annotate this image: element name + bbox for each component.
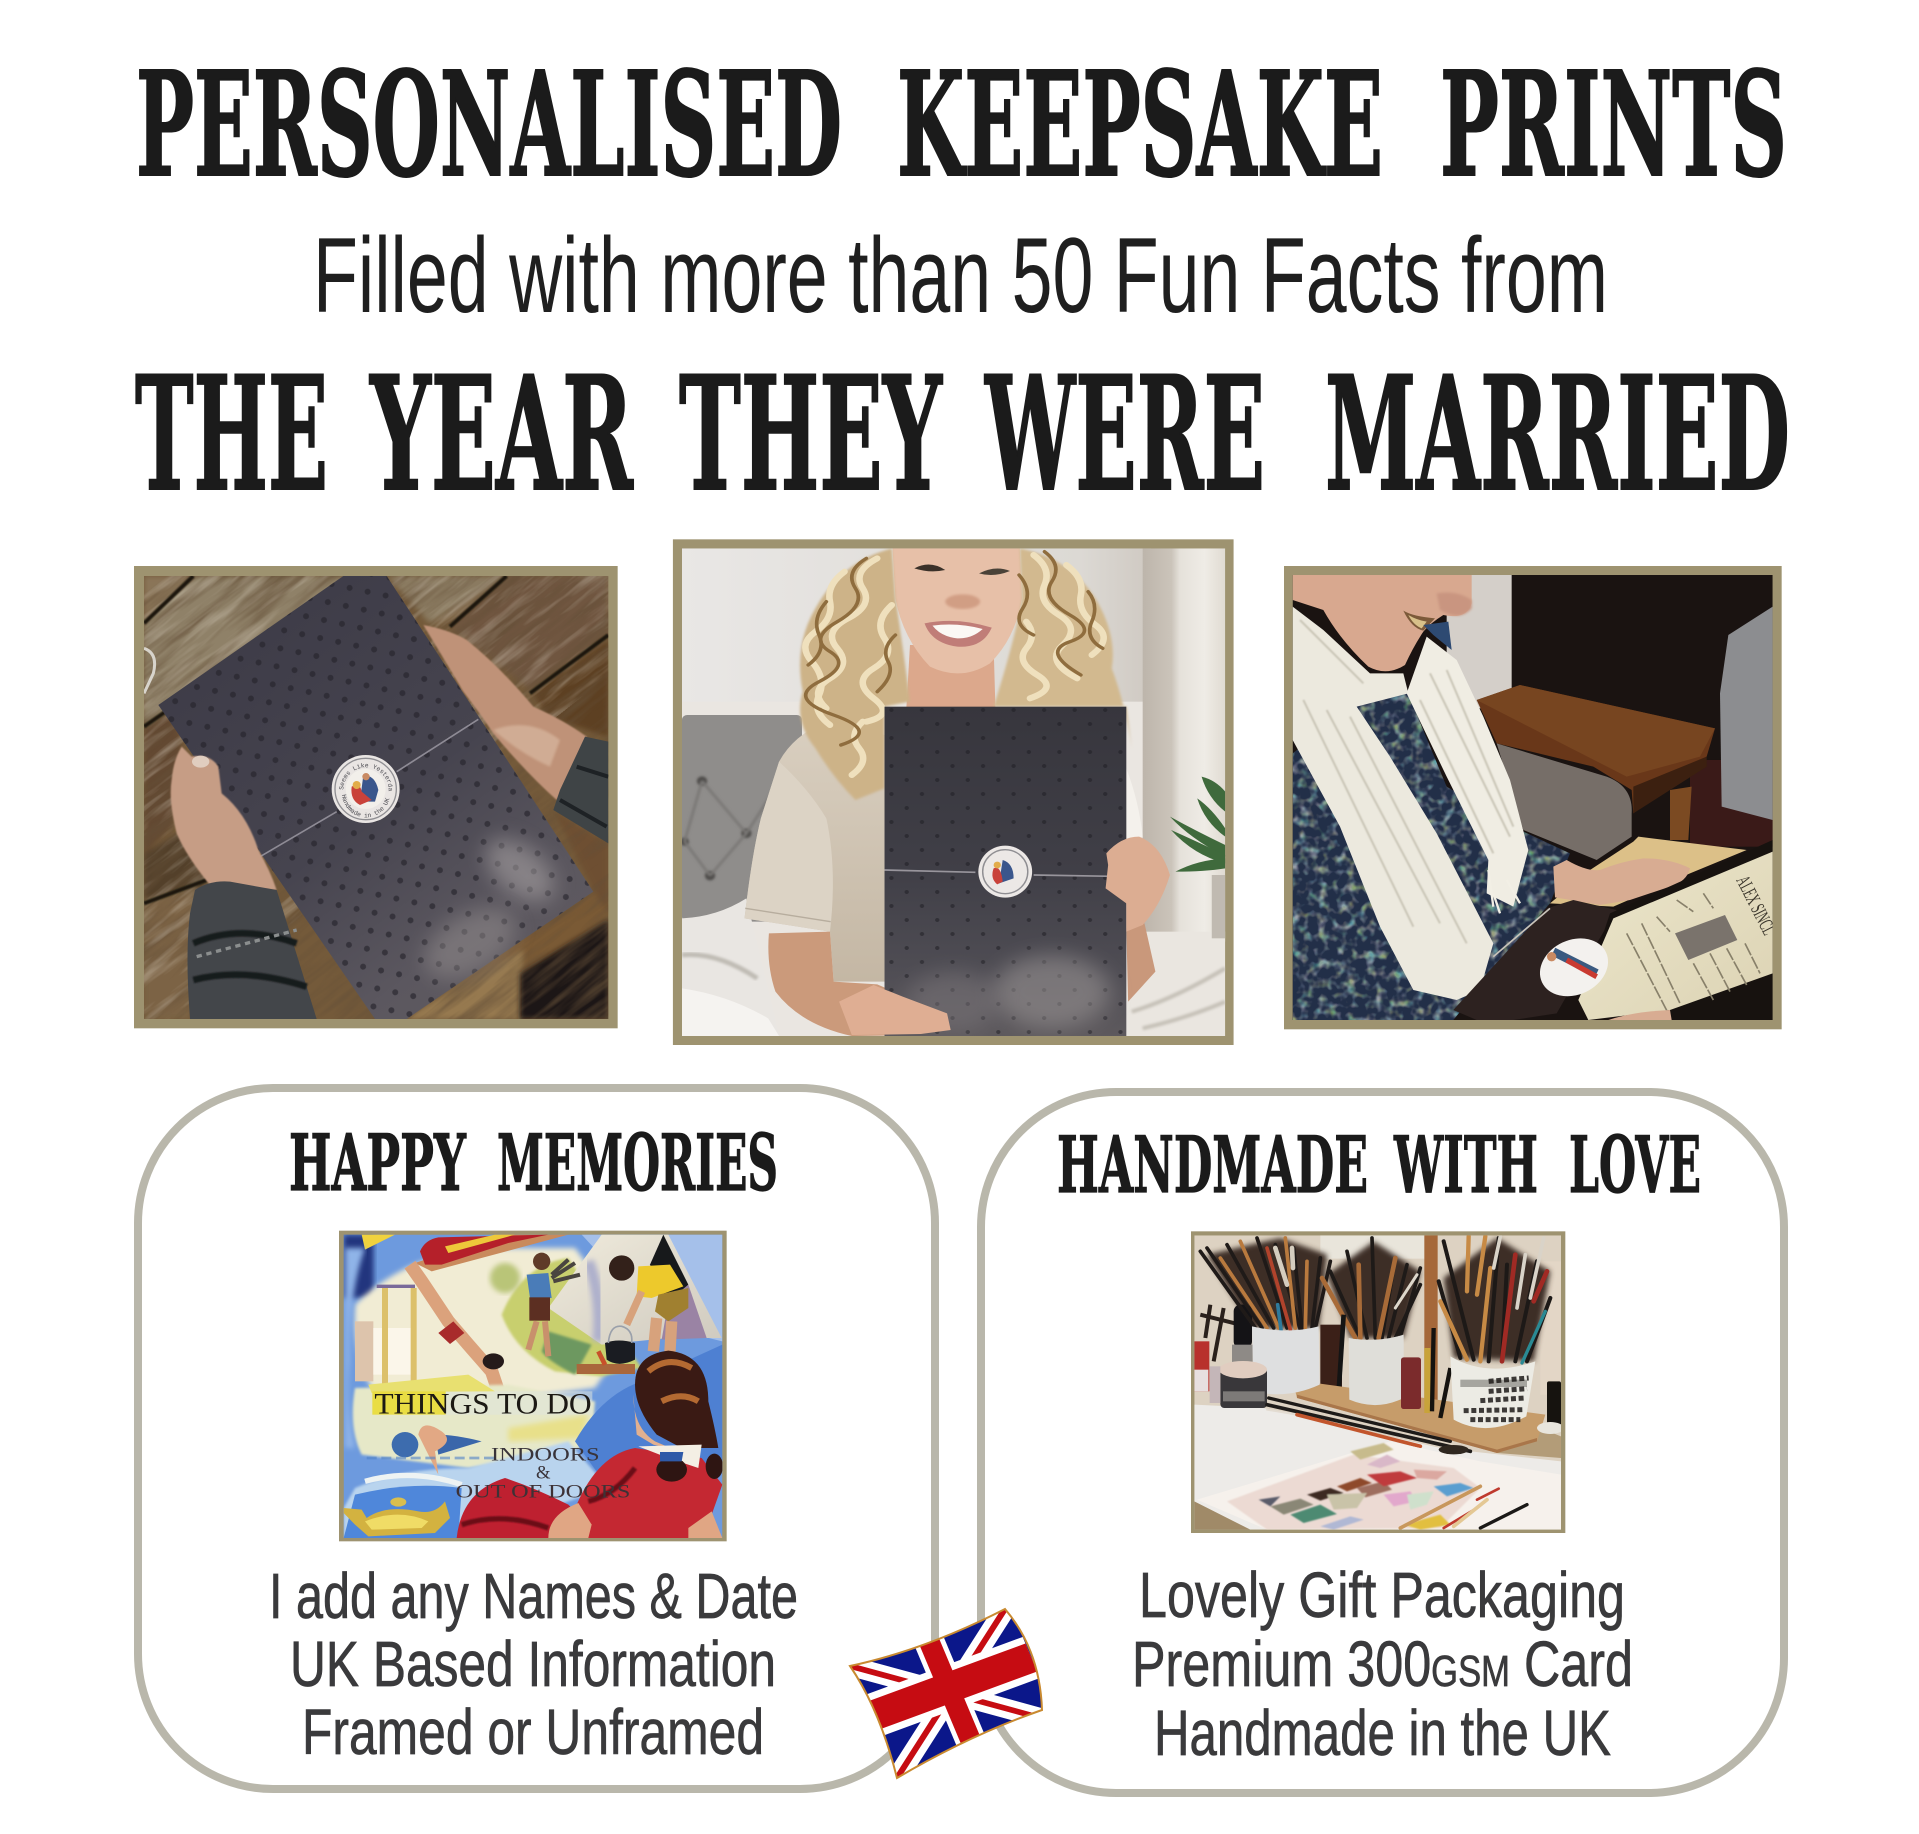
heading: happy memories xyxy=(289,1118,778,1209)
table surface xyxy=(1194,1405,1561,1530)
plant and pot xyxy=(1170,777,1225,938)
title: The Year They Were Married: WERE xyxy=(984,343,1265,527)
dark red floor xyxy=(1690,760,1773,847)
grey sofa arm xyxy=(1497,743,1632,860)
face xyxy=(1293,575,1472,671)
left hand fingers xyxy=(839,985,951,1035)
grass xyxy=(502,1258,642,1376)
cover title: OUT OF DOORS xyxy=(456,1481,630,1502)
right hand fingers xyxy=(1106,837,1170,932)
brush cluster 3 xyxy=(1439,1236,1550,1363)
left hand and sleeve xyxy=(171,747,317,1019)
photo: envelope held over wooden table xyxy=(134,566,618,1028)
pool building xyxy=(355,1321,373,1381)
title: The Year They Were Married xyxy=(135,343,1790,527)
heading: happy memories: HAPPY xyxy=(289,1118,467,1209)
arm and hand left xyxy=(768,932,884,1036)
cover title: THINGS TO DO xyxy=(374,1388,592,1420)
boy with sticks xyxy=(527,1253,580,1356)
sticker xyxy=(1530,928,1618,1007)
long brushes across the table xyxy=(1267,1398,1561,1488)
wooden tray xyxy=(1295,1381,1545,1453)
body text right: Premium 300GSM Card xyxy=(1132,1628,1633,1700)
body text left: Framed or Unframed xyxy=(302,1696,764,1768)
seal sticker xyxy=(978,846,1032,898)
wood planks xyxy=(144,576,608,1019)
body text right: Lovely Gift Packaging xyxy=(1139,1559,1625,1631)
boy in yellow xyxy=(609,1255,688,1351)
title: Personalised Keepsake Prints: KEEPSAKE xyxy=(897,40,1383,209)
envelope xyxy=(885,707,1126,1036)
dark folder xyxy=(1453,900,1617,1020)
heading: handmade with love: HANDMADE xyxy=(1057,1120,1368,1211)
image: paint brushes and palette xyxy=(1191,1231,1565,1533)
sky and tent xyxy=(582,1235,722,1341)
basket xyxy=(1450,1356,1535,1428)
title: The Year They Were Married: YEAR xyxy=(369,343,634,527)
photo: smiling woman holding envelope xyxy=(673,539,1234,1045)
newspaper print xyxy=(1578,852,1780,1020)
swimmer xyxy=(367,1425,495,1475)
table xyxy=(1477,685,1715,840)
body text left: UK Based Information xyxy=(290,1628,776,1700)
headboard xyxy=(682,715,802,922)
brush cluster 2 xyxy=(1322,1238,1420,1338)
title: The Year They Were Married: THEY xyxy=(679,343,943,527)
hand on frame xyxy=(1608,1010,1672,1020)
body text right xyxy=(1132,1559,1633,1769)
dress xyxy=(1293,690,1570,1020)
pencils xyxy=(1400,1486,1527,1528)
hair mass over shoulders xyxy=(800,548,910,800)
panel: handmade with love xyxy=(981,1092,1784,1793)
watercolour palette paper xyxy=(1197,1441,1561,1530)
panel: happy memories xyxy=(138,1088,935,1789)
mug handle xyxy=(144,648,155,693)
heading: handmade with love: WITH xyxy=(1393,1120,1538,1211)
genie lamp xyxy=(344,1497,450,1536)
white pots xyxy=(1252,1326,1320,1394)
seal sticker: Seems Like Yesterday xyxy=(339,763,393,792)
track and train xyxy=(415,1235,568,1271)
diving figure xyxy=(410,1265,504,1391)
body text left xyxy=(269,1560,798,1768)
arm right xyxy=(1126,923,1155,1002)
cover title xyxy=(372,1388,630,1502)
body text left: I add any Names & Date xyxy=(269,1560,798,1632)
bed linen xyxy=(682,898,752,922)
newspaper print: ALEX SINCL xyxy=(1732,872,1780,939)
cover title: & xyxy=(536,1463,551,1484)
frame xyxy=(1580,840,1773,1020)
cover title: INDOORS xyxy=(491,1445,600,1466)
white scarf xyxy=(1293,607,1493,1000)
jars xyxy=(1194,1361,1564,1434)
grey chair right xyxy=(1720,607,1773,820)
envelope xyxy=(158,576,593,1019)
neck and face xyxy=(906,645,995,708)
dark brush masses xyxy=(1207,1238,1550,1361)
image: things to do vintage cover xyxy=(339,1231,727,1541)
lower blue xyxy=(575,1345,722,1488)
title: The Year They Were Married: THE xyxy=(135,343,328,527)
red dress xyxy=(457,1448,722,1538)
right hand and sleeve xyxy=(423,625,608,843)
title: Personalised Keepsake Prints: PERSONALISED xyxy=(136,40,842,209)
cream envelope xyxy=(1550,837,1747,907)
brush handles behind xyxy=(1424,1235,1438,1402)
photo: older woman reading framed print xyxy=(1284,566,1782,1029)
cream glade xyxy=(355,1248,635,1398)
girl head and braids xyxy=(633,1351,723,1482)
seal sticker xyxy=(332,755,400,823)
t-shirt xyxy=(745,722,885,982)
curly hair strands xyxy=(805,552,1104,775)
icon: union jack flag xyxy=(829,1586,1073,1801)
hand xyxy=(1553,858,1690,905)
brush cluster 1 xyxy=(1200,1238,1330,1330)
plank seams xyxy=(144,576,608,903)
seal sticker: Handmade in the UK xyxy=(342,794,390,818)
yellow ground and water xyxy=(353,1385,595,1468)
cooking pot and fire xyxy=(577,1326,635,1374)
heading: handmade with love: LOVE xyxy=(1569,1120,1701,1211)
heading: happy memories: MEMORIES xyxy=(497,1118,778,1209)
wood grain xyxy=(144,576,608,1019)
body text right: Handmade in the UK xyxy=(1154,1697,1611,1769)
